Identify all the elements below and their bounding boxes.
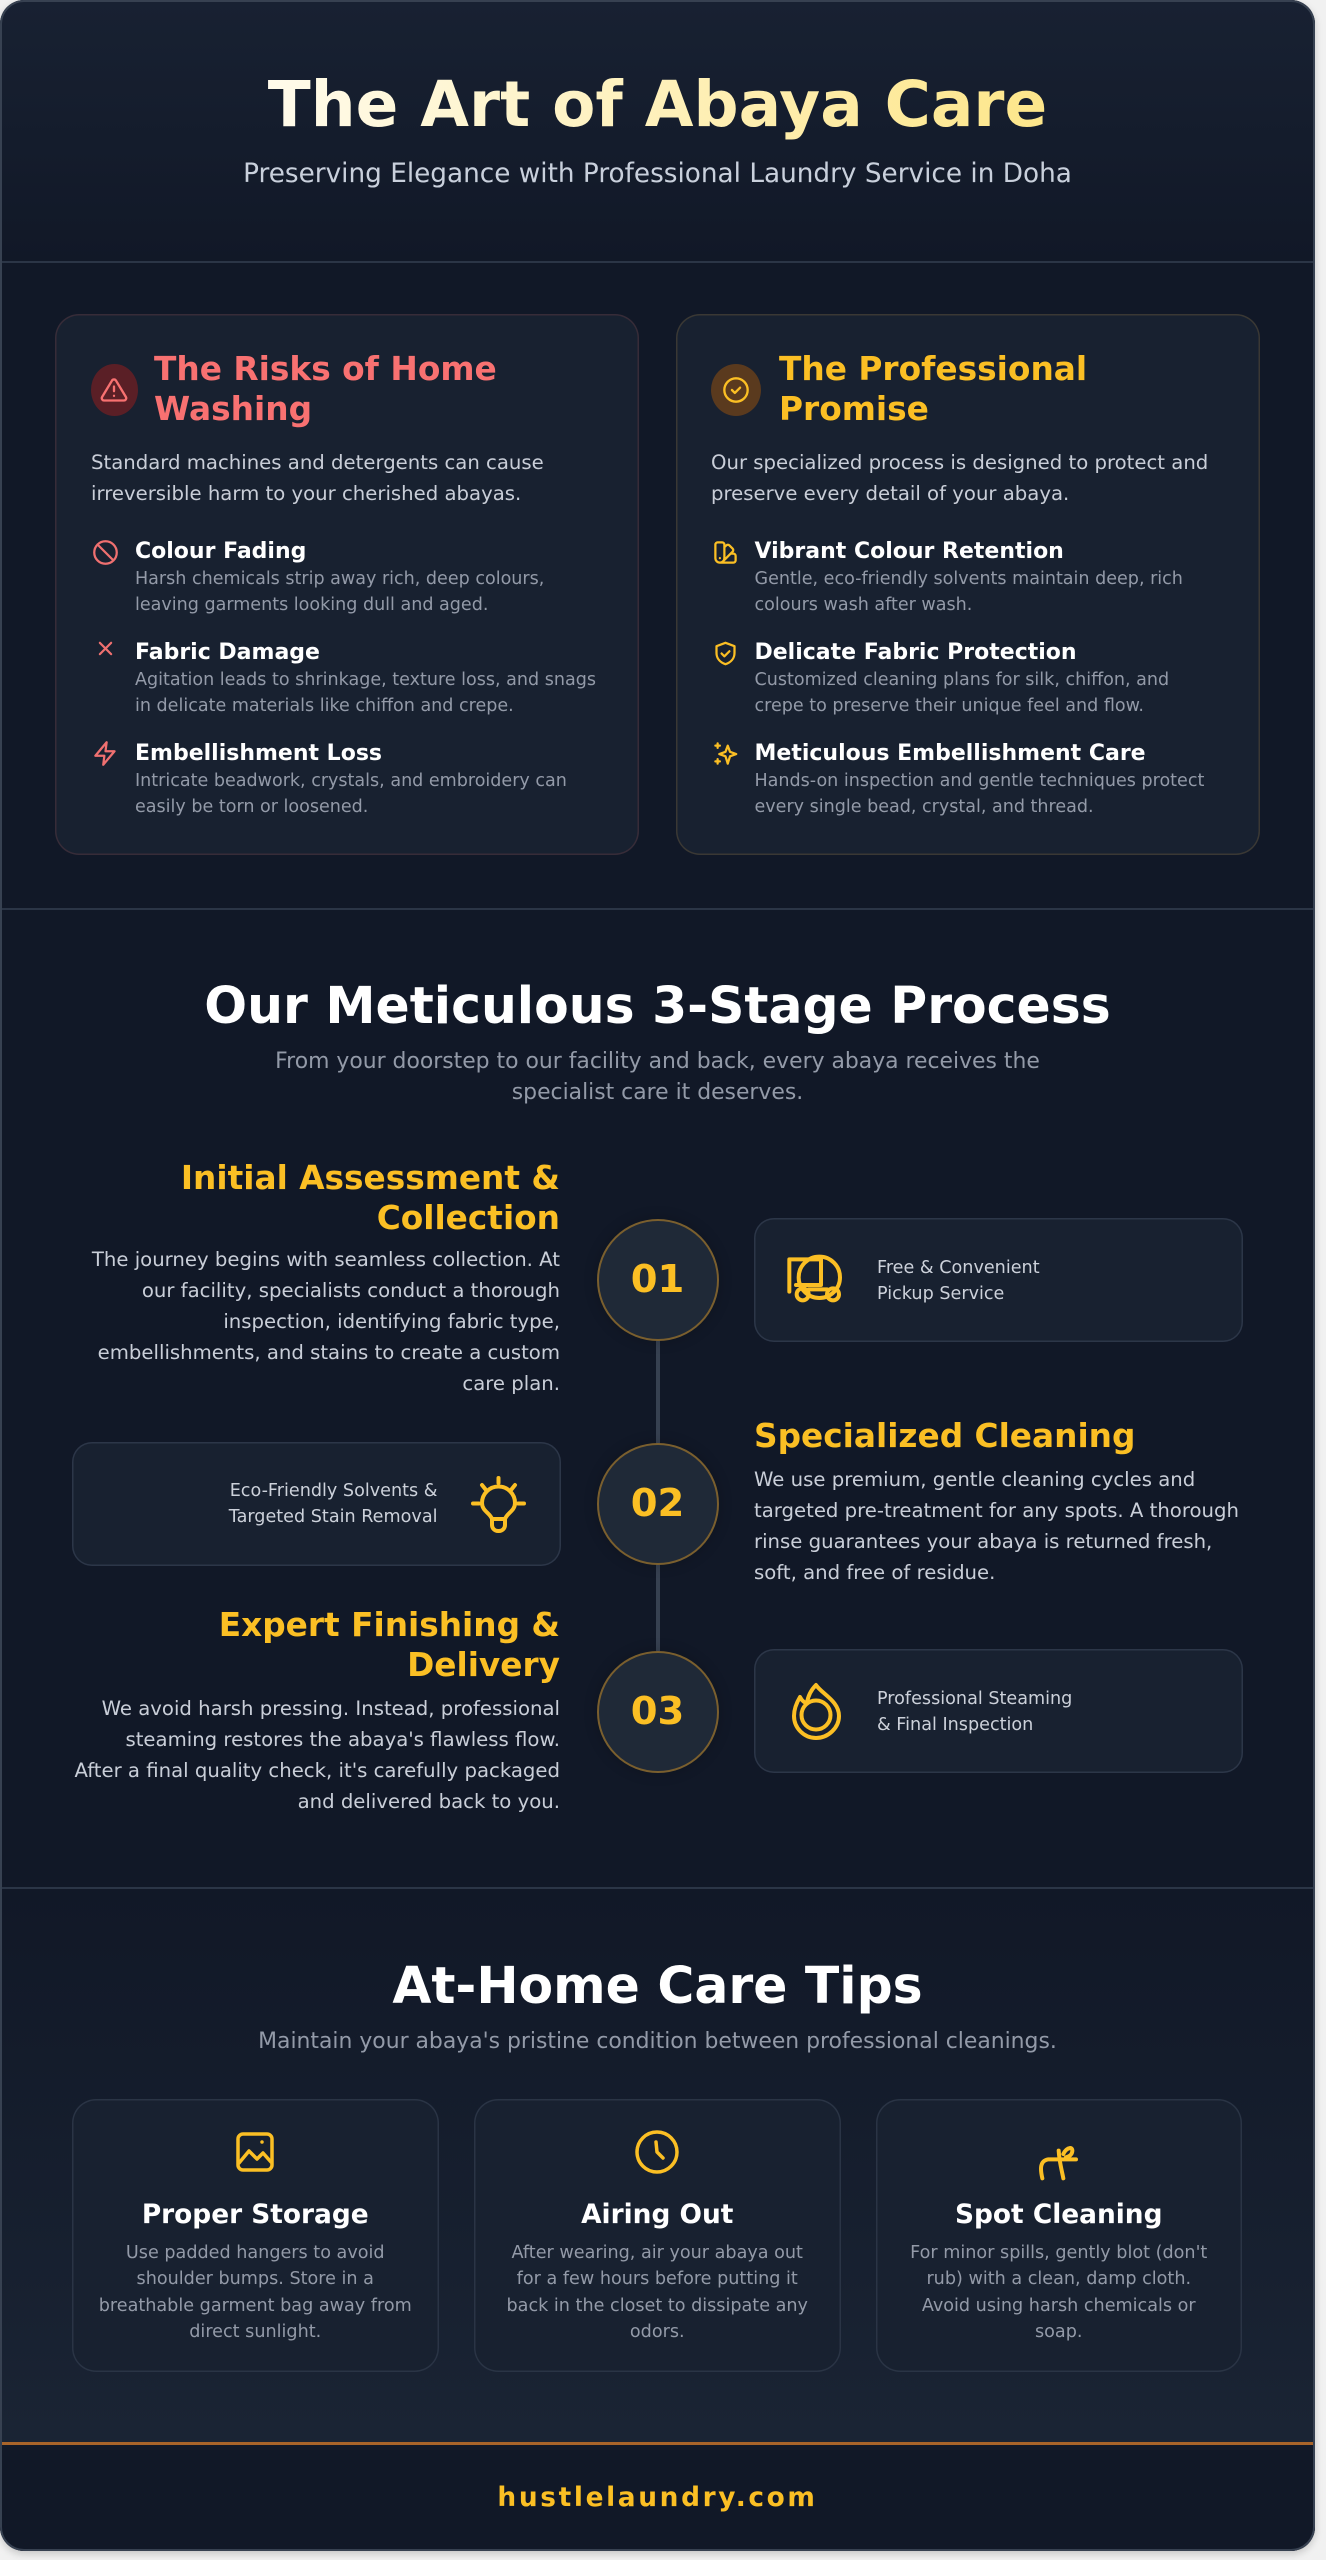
icon: cleaning squiggle bbox=[1039, 2146, 1078, 2180]
process subtitle: From your doorstep to our facility and back, every abaya receives the bbox=[275, 1048, 1040, 1074]
tip text: rub) with a clean, damp cloth. bbox=[926, 2269, 1191, 2289]
step 1 text: The journey begins with seamless collection. At bbox=[92, 1248, 560, 1271]
promise: colour retention: Gentle, eco-friendly solvents maintain deep, rich bbox=[754, 569, 1183, 589]
tip card: storage bbox=[72, 2099, 438, 2372]
risk: embellishment loss: Embellishment Loss bbox=[135, 740, 382, 766]
promise: colour retention: colours wash after wash. bbox=[754, 595, 972, 615]
tip title: Proper Storage bbox=[142, 2198, 369, 2230]
risk: colour fading: leaving garments looking dull and aged. bbox=[135, 595, 488, 615]
step 2 text: soft, and free of residue. bbox=[754, 1561, 995, 1584]
panel: risks of home washing bbox=[55, 314, 639, 855]
step 1 text: embellishments, and stains to create a custom bbox=[98, 1341, 560, 1364]
callout text bbox=[228, 1481, 438, 1527]
tip text: breathable garment bag away from bbox=[99, 2296, 412, 2316]
tip text: For minor spills, gently blot (don't bbox=[910, 2243, 1207, 2263]
promise: embellishment care: Meticulous Embellishment Care bbox=[754, 740, 1146, 766]
callout text: Pickup Service bbox=[877, 1284, 1004, 1304]
tip text: direct sunlight. bbox=[189, 2322, 321, 2342]
step 3 text: Expert Finishing & bbox=[219, 1606, 560, 1644]
risk: fabric damage: Agitation leads to shrinkage, texture loss, and snags bbox=[135, 670, 596, 690]
icon: shield check bbox=[715, 642, 736, 666]
step 2 number: 02 bbox=[631, 1481, 684, 1526]
risk: fabric damage: in delicate materials like chiffon and crepe. bbox=[135, 696, 514, 716]
promise intro text: Our specialized process is designed to protect and bbox=[711, 451, 1208, 474]
process subtitle: specialist care it deserves. bbox=[512, 1080, 803, 1104]
risk: colour fading: Colour Fading bbox=[135, 538, 306, 564]
step 3 callout: steaming bbox=[754, 1649, 1243, 1773]
risk: fabric damage bbox=[135, 640, 596, 716]
step 3 text: After a final quality check, it's carefully packaged bbox=[74, 1758, 560, 1782]
promise: fabric protection bbox=[754, 640, 1169, 716]
callout text: Eco-Friendly Solvents & bbox=[230, 1481, 438, 1501]
step 1 number: 01 bbox=[631, 1257, 684, 1302]
heading: process: Our Meticulous 3-Stage Process bbox=[204, 976, 1111, 1035]
step 2 callout: solvents bbox=[72, 1442, 561, 1566]
heading: tips: At-Home Care Tips bbox=[392, 1956, 923, 2014]
tip card: spot cleaning bbox=[876, 2099, 1242, 2372]
risk: colour fading bbox=[135, 538, 544, 615]
step 3 text: We avoid harsh pressing. Instead, professional bbox=[102, 1696, 560, 1720]
step 2 text bbox=[754, 1417, 1239, 1584]
promise: embellishment care: every single bead, crystal, and thread. bbox=[754, 797, 1094, 817]
tip title: Spot Cleaning bbox=[955, 2198, 1162, 2230]
icon: delivery truck bbox=[787, 1254, 842, 1302]
icon: sparkles bbox=[714, 742, 738, 765]
step 1 text bbox=[92, 1159, 560, 1395]
heading: risks: Washing bbox=[154, 390, 312, 428]
step 2 text: targeted pre-treatment for any spots. A thorough bbox=[754, 1499, 1239, 1522]
risks intro text bbox=[91, 451, 544, 505]
process subtitle bbox=[275, 1048, 1040, 1104]
tip text: shoulder bumps. Store in a bbox=[137, 2269, 374, 2289]
tip text: soap. bbox=[1035, 2322, 1082, 2342]
step 1 text: Collection bbox=[377, 1199, 560, 1237]
callout text: & Final Inspection bbox=[877, 1715, 1033, 1735]
risks intro text: irreversible harm to your cherished abayas. bbox=[91, 482, 521, 505]
icon: colour swatch bbox=[714, 541, 737, 564]
icon: check circle bbox=[711, 364, 761, 416]
tip text: Use padded hangers to avoid bbox=[126, 2243, 385, 2263]
icon: clock bbox=[635, 2130, 679, 2174]
promise intro text bbox=[711, 451, 1208, 505]
step 3 text bbox=[74, 1606, 560, 1812]
callout text: Targeted Stain Removal bbox=[229, 1507, 438, 1527]
icon: lightning bolt bbox=[94, 741, 116, 766]
step 1 text: Initial Assessment & bbox=[181, 1159, 560, 1197]
promise: fabric protection: Customized cleaning plans for silk, chiffon, and bbox=[754, 670, 1169, 690]
promise intro text: preserve every detail of your abaya. bbox=[711, 482, 1069, 505]
callout text: Professional Steaming bbox=[877, 1689, 1072, 1709]
heading: promise: Promise bbox=[779, 390, 929, 428]
heading: risks bbox=[154, 350, 497, 428]
icon: flame bbox=[792, 1682, 841, 1740]
promise: colour retention bbox=[754, 538, 1183, 615]
step 2 text: rinse guarantees your abaya is returned fresh, bbox=[754, 1530, 1212, 1553]
risk: fabric damage: Fabric Damage bbox=[135, 640, 320, 664]
tip text: for a few hours before putting it bbox=[517, 2269, 798, 2289]
tip text: After wearing, air your abaya out bbox=[512, 2243, 803, 2263]
panel: professional promise bbox=[676, 314, 1260, 855]
callout text bbox=[877, 1258, 1040, 1304]
step 1 text: inspection, identifying fabric type, bbox=[223, 1310, 560, 1333]
tips subtitle: Maintain your abaya's pristine condition between professional cleanings. bbox=[258, 2028, 1057, 2054]
risk: colour fading: Harsh chemicals strip away rich, deep colours, bbox=[135, 569, 544, 589]
step 1 text: care plan. bbox=[462, 1372, 560, 1395]
step 1 text: our facility, specialists conduct a thorough bbox=[142, 1279, 560, 1302]
risk: embellishment loss bbox=[135, 740, 567, 817]
heading: promise: The Professional bbox=[779, 350, 1087, 388]
promise: fabric protection: crepe to preserve their unique feel and flow. bbox=[754, 696, 1144, 716]
step 2 number bbox=[596, 1443, 718, 1565]
title: The Art of Abaya Care bbox=[268, 68, 1047, 141]
footer url: hustlelaundry.com bbox=[497, 2482, 818, 2513]
icon: x mark bbox=[98, 642, 112, 656]
callout text bbox=[877, 1689, 1072, 1735]
icon: warning triangle bbox=[91, 364, 138, 416]
tip title: Airing Out bbox=[581, 2198, 733, 2230]
step 3 text: steaming restores the abaya's flawless flow. bbox=[125, 1728, 560, 1750]
step 2 text: We use premium, gentle cleaning cycles and bbox=[754, 1468, 1195, 1491]
risk: embellishment loss: Intricate beadwork, crystals, and embroidery can bbox=[135, 771, 567, 791]
step 3 number bbox=[596, 1651, 718, 1773]
step 2 text: Specialized Cleaning bbox=[754, 1417, 1135, 1455]
promise: colour retention: Vibrant Colour Retention bbox=[754, 538, 1064, 564]
promise: fabric protection: Delicate Fabric Protection bbox=[754, 640, 1077, 664]
heading: promise bbox=[779, 350, 1087, 428]
promise: embellishment care bbox=[754, 740, 1204, 817]
tip text bbox=[99, 2243, 412, 2342]
tip text: odors. bbox=[630, 2322, 685, 2342]
risks intro text: Standard machines and detergents can cause bbox=[91, 451, 544, 474]
footer rule bbox=[2, 2442, 1313, 2445]
callout text: Free & Convenient bbox=[877, 1258, 1040, 1278]
icon: ban bbox=[93, 540, 118, 565]
risk: embellishment loss: easily be torn or loosened. bbox=[135, 797, 368, 817]
heading: risks: The Risks of Home bbox=[154, 350, 497, 388]
tip text bbox=[507, 2243, 808, 2342]
tip text: back in the closet to dissipate any bbox=[507, 2296, 808, 2316]
promise: embellishment care: Hands-on inspection and gentle techniques protect bbox=[754, 771, 1204, 791]
icon: picture bbox=[236, 2132, 274, 2172]
step 1 number bbox=[596, 1219, 718, 1341]
tip text bbox=[910, 2243, 1207, 2342]
tip card: airing bbox=[474, 2099, 840, 2372]
subtitle: Preserving Elegance with Professional Laundry Service in Doha bbox=[243, 159, 1072, 189]
step 3 number: 03 bbox=[631, 1689, 684, 1734]
step 3 text: Delivery bbox=[407, 1646, 560, 1684]
timeline connector bbox=[656, 1340, 660, 1651]
step 1 callout: pickup bbox=[754, 1218, 1243, 1342]
tip text: Avoid using harsh chemicals or bbox=[922, 2296, 1196, 2316]
step 3 text: and delivered back to you. bbox=[298, 1790, 560, 1812]
icon: light bulb bbox=[471, 1476, 526, 1533]
